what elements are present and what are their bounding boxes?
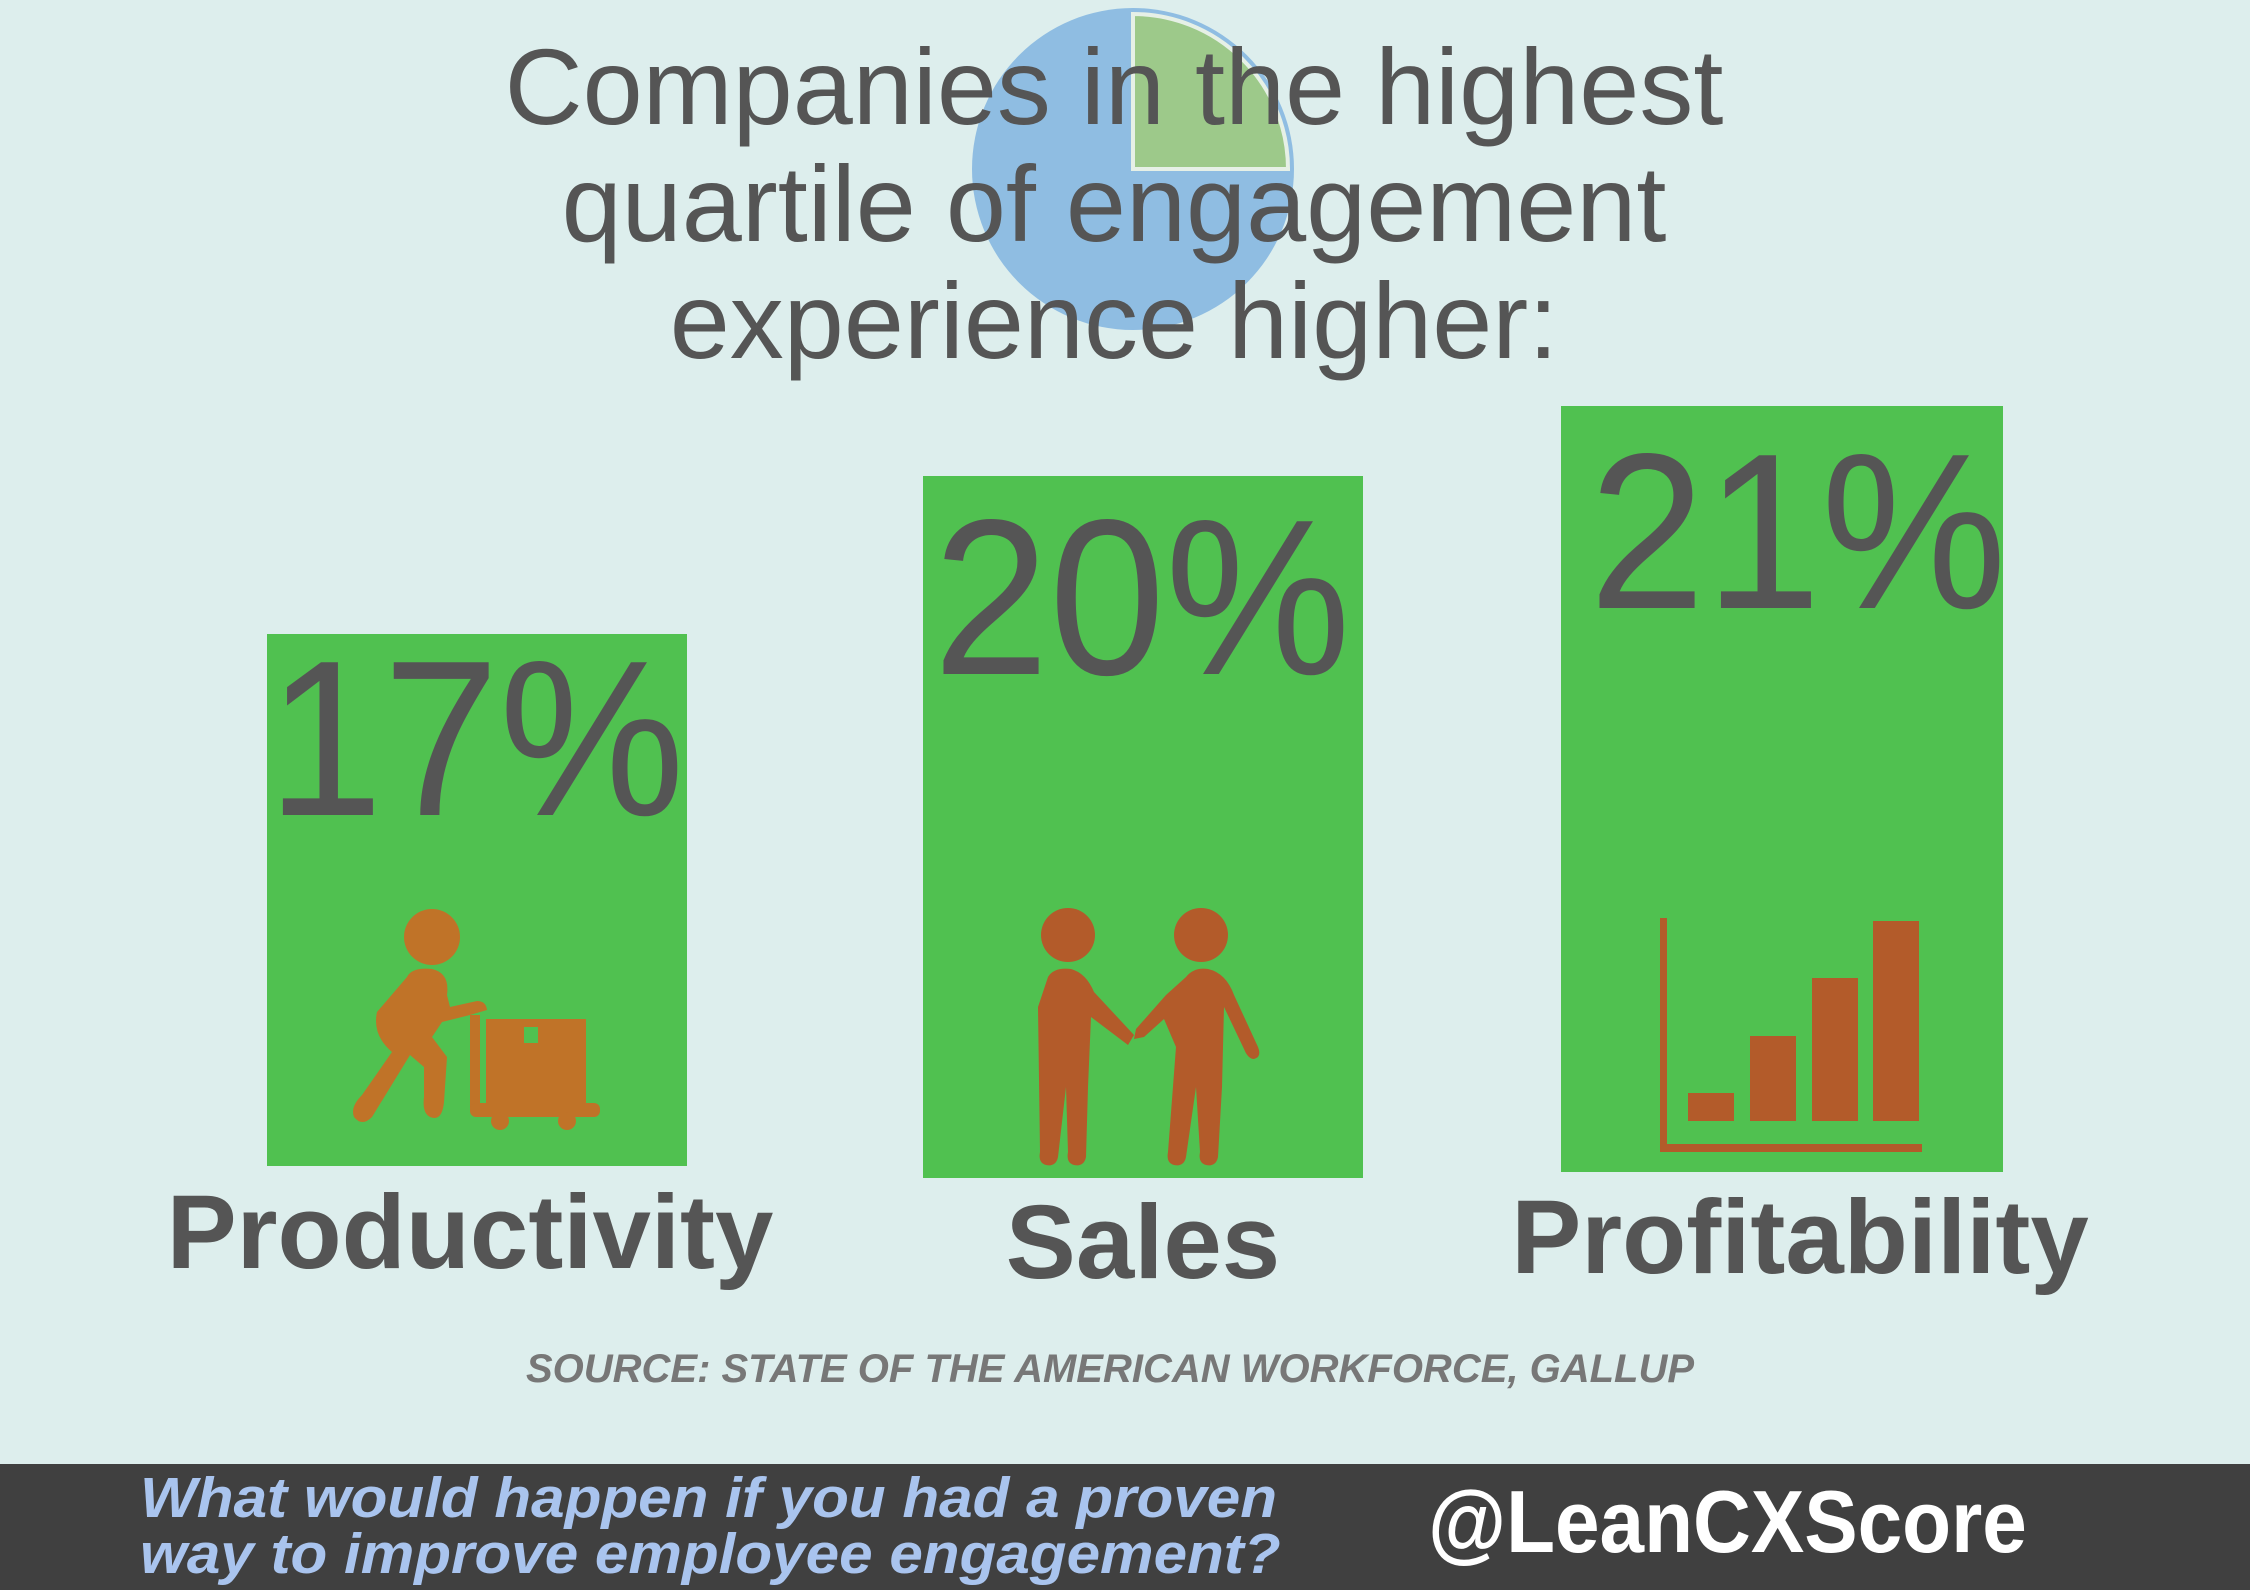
footer question: way to improve employee engagement? [140, 1522, 1281, 1586]
icon: bar chart [1660, 918, 1922, 1152]
label: profitability: Profitability [1511, 1179, 2089, 1296]
footer handle: @LeanCXScore [1428, 1472, 2027, 1571]
title: quartile of engagement [562, 143, 1666, 264]
footer bar [0, 1464, 2250, 1590]
footer question [140, 1466, 1281, 1586]
icon: worker with cart [353, 909, 600, 1130]
label: sales: Sales [1006, 1184, 1280, 1301]
title: experience higher: [670, 260, 1558, 381]
percent 21: 21% [1589, 408, 2007, 656]
percent 20: 20% [933, 474, 1351, 722]
panel: sales [923, 476, 1363, 1178]
panel: productivity [267, 634, 687, 1166]
icon: handshake [1038, 908, 1260, 1166]
percent 17: 17% [267, 615, 685, 863]
pie chart decoration [972, 8, 1294, 330]
title [505, 26, 1723, 381]
panel: profitability [1561, 406, 2003, 1172]
label: productivity: Productivity [167, 1174, 773, 1291]
footer question: What would happen if you had a proven [140, 1466, 1277, 1530]
title: Companies in the highest [505, 26, 1723, 147]
source note: SOURCE: STATE OF THE AMERICAN WORKFORCE, GALLUP [526, 1347, 1694, 1391]
